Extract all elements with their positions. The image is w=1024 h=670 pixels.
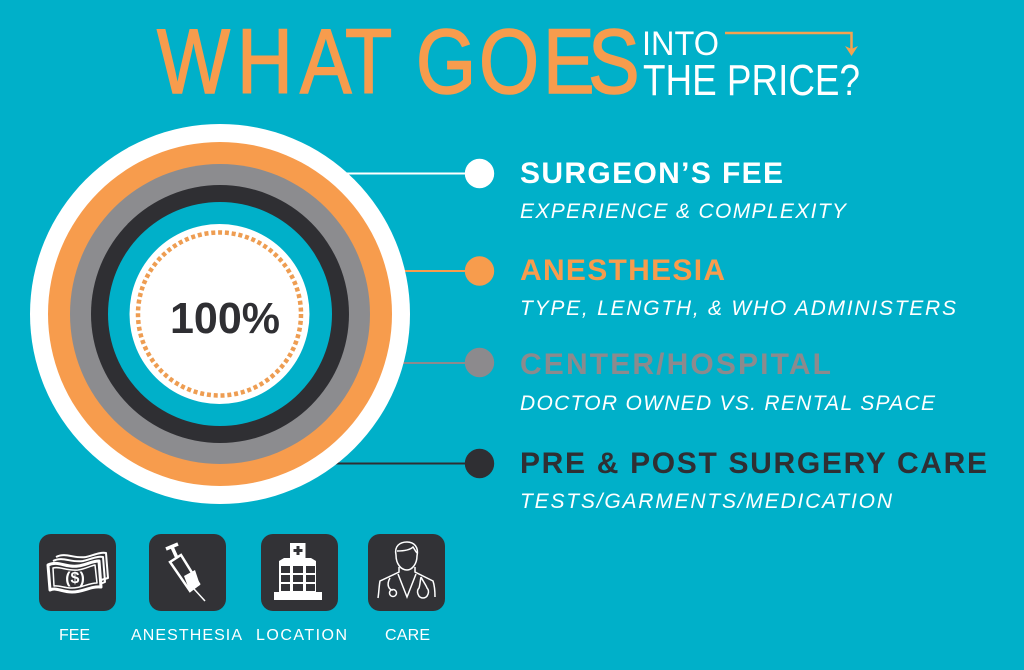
icon: location hospital [261,534,338,611]
title: WHAT GOES [157,11,640,114]
connector lines [336,174,480,464]
icon labels: CARE [385,627,430,644]
item: anesthesia: TYPE, LENGTH, & WHO ADMINISTERS [520,297,956,320]
item: surgeon's fee: EXPERIENCE & COMPLEXITY [520,200,848,223]
icon: anesthesia syringe [149,534,226,611]
concentric ring chart: 100% [170,294,280,343]
item: center/hospital [465,348,936,415]
icon: care doctor [368,534,445,611]
item: pre and post surgery care: TESTS/GARMENTS/MEDICATION [520,490,893,513]
arrow: title arrow [725,33,858,56]
item: pre and post surgery care: PRE & POST SURGERY CARE [520,447,987,480]
item: surgeon's fee: SURGEON’S FEE [520,157,783,190]
title: INTO [642,25,719,63]
icon: fee money: ($) [65,570,85,587]
icon labels: ANESTHESIA [131,627,242,644]
item: pre and post surgery care [465,447,987,513]
item: surgeon's fee [465,157,848,223]
concentric ring chart [30,124,410,504]
icon labels [59,627,430,644]
title [157,11,860,114]
item: center/hospital: CENTER/HOSPITAL [520,348,831,381]
icon labels: LOCATION [256,627,347,644]
title: THE PRICE? [643,56,860,105]
item: anesthesia: ANESTHESIA [520,254,725,287]
item: anesthesia [465,254,956,320]
icon labels: FEE [59,627,90,644]
icon: fee money [39,534,116,611]
item: center/hospital: DOCTOR OWNED VS. RENTAL SPACE [520,392,936,415]
